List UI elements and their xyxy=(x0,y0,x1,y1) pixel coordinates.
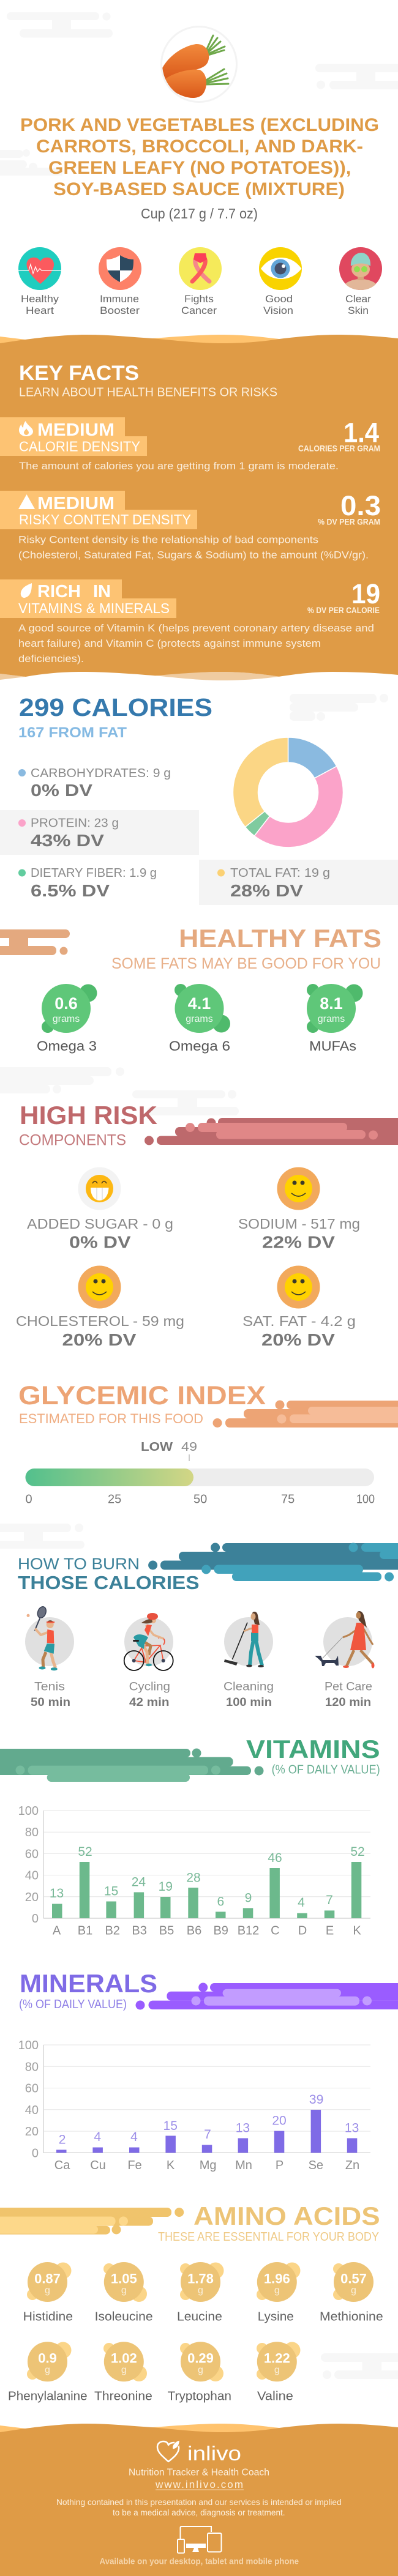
fact: risky content density xyxy=(0,490,381,560)
amino: isoleucine: g xyxy=(121,2285,127,2296)
amino: phenylalanine: 0.9 xyxy=(38,2351,57,2366)
label: tennis: 50 min xyxy=(31,1696,70,1709)
bar chart: vitamins: E xyxy=(326,1924,334,1937)
subheading: glycemic index: ESTIMATED FOR THIS FOOD xyxy=(19,1411,203,1426)
label: immune booster: Immune xyxy=(100,293,139,305)
tagline: Nutrition Tracker & Health Coach xyxy=(129,2467,269,2478)
amino: histidine xyxy=(23,2262,73,2324)
bar chart: vitamins: 46 xyxy=(268,1851,282,1865)
serving size: Cup (217 g / 7.7 oz) xyxy=(141,206,258,221)
fact: rich in vitamins and minerals: VITAMINS & MINERALS xyxy=(18,600,170,616)
background wisp xyxy=(0,1524,84,1549)
amino: lysine: 1.96 xyxy=(264,2271,290,2286)
disclaimer xyxy=(56,2497,342,2517)
macro: dietary fiber: DIETARY FIBER: 1.9 g xyxy=(31,866,157,880)
bar chart: minerals: 80 xyxy=(25,2060,39,2074)
amino: tryptophan: 0.29 xyxy=(187,2351,214,2366)
badge: omega 3: 0.6 xyxy=(54,994,78,1013)
risk: cholesterol xyxy=(16,1265,184,1349)
bar chart: minerals: Cu xyxy=(90,2159,106,2172)
bar chart: vitamins: B5 xyxy=(159,1924,174,1937)
heading: how to burn: HOW TO BURN xyxy=(18,1554,140,1573)
heading: those calories: THOSE CALORIES xyxy=(18,1572,200,1593)
label: cleaning xyxy=(223,1680,274,1709)
logo: inlivo xyxy=(157,2440,241,2465)
carrot bottom xyxy=(164,70,206,98)
badge: mufas xyxy=(307,984,362,1054)
bar chart: vitamins: 4 xyxy=(298,1896,305,1910)
fact: rich in vitamins and minerals: A good source of Vitamin K (helps prevent coronary artery disease and xyxy=(18,622,374,634)
donut chart xyxy=(233,737,343,847)
bar chart: minerals: Se xyxy=(309,2159,323,2172)
panel: high risk components xyxy=(0,1067,398,1349)
bar chart: vitamins: B6 xyxy=(187,1924,201,1937)
bar chart: minerals: Mg xyxy=(200,2159,216,2172)
decorative wisp xyxy=(213,1400,398,1428)
bar chart: minerals: 100 xyxy=(18,2039,39,2052)
fact: risky content density: MEDIUM xyxy=(37,494,115,513)
gauge: glycemic index: 49 xyxy=(181,1440,197,1454)
icon: leaf xyxy=(21,583,32,598)
bar chart: vitamins: 7 xyxy=(326,1893,333,1907)
panel: glycemic index xyxy=(18,1381,398,1506)
bar chart: minerals: Mn xyxy=(235,2159,252,2172)
bar chart: vitamins: C xyxy=(271,1924,280,1937)
panel: vitamins xyxy=(0,1735,380,1937)
bar chart: minerals: 39 xyxy=(309,2093,323,2107)
icon: warning xyxy=(18,494,35,509)
amino: methionine: 0.57 xyxy=(340,2271,367,2286)
badge: omega 6 xyxy=(169,984,230,1054)
activity: tennis xyxy=(25,1606,74,1670)
icon: devices xyxy=(178,2526,222,2553)
heading: key facts: LEARN ABOUT HEALTH BENEFITS OR RISKS xyxy=(19,385,277,399)
bar chart: minerals: 2 xyxy=(59,2133,66,2146)
label: clear skin: Skin xyxy=(348,305,369,316)
amino: phenylalanine: g xyxy=(45,2365,50,2375)
risk: saturated fat xyxy=(242,1265,356,1349)
gauge: glycemic index xyxy=(26,1440,375,1506)
heading: minerals: MINERALS xyxy=(20,1969,157,1998)
bar chart: minerals xyxy=(18,2039,370,2172)
amino: valine: Valine xyxy=(257,2390,293,2403)
badge: mufas: MUFAs xyxy=(309,1038,356,1054)
label: cycling xyxy=(129,1680,170,1709)
bar chart: vitamins: 28 xyxy=(186,1871,201,1885)
logo: inlivo: inlivo xyxy=(187,2442,241,2465)
amino: leucine xyxy=(177,2262,224,2324)
bar chart: minerals: 15 xyxy=(163,2119,178,2133)
decorative wisp xyxy=(0,1749,263,1782)
bar chart: vitamins: 100 xyxy=(18,1804,39,1818)
heading: calories: 299 CALORIES xyxy=(19,693,212,721)
amino: lysine xyxy=(257,2262,300,2324)
amino: phenylalanine xyxy=(8,2342,88,2403)
bar chart: minerals: Fe xyxy=(127,2159,142,2172)
amino: histidine: 0.87 xyxy=(34,2271,61,2286)
fact: rich in vitamins and minerals: deficiencies). xyxy=(18,653,84,664)
bar chart: vitamins: 60 xyxy=(25,1847,39,1861)
risk: cholesterol: CHOLESTEROL - 59 mg xyxy=(16,1313,184,1329)
bar chart: minerals: 4 xyxy=(94,2130,101,2144)
gauge: glycemic index: 0 xyxy=(26,1493,32,1506)
fact: risky content density: % DV PER GRAM xyxy=(318,516,380,526)
orange panel background with waves xyxy=(0,335,398,680)
bar chart: vitamins: 19 xyxy=(159,1880,173,1894)
bar chart: vitamins xyxy=(18,1804,370,1937)
background wisp xyxy=(290,694,388,721)
fact: risky content density: RISKY CONTENT DENSITY xyxy=(19,512,191,527)
heading: vitamins: VITAMINS xyxy=(246,1735,380,1763)
availability note: Available on your desktop, tablet and mobile phone xyxy=(99,2556,299,2566)
bar chart: vitamins: D xyxy=(298,1924,307,1937)
fact: calorie density: The amount of calories you are getting from 1 gram is moderate. xyxy=(19,460,339,472)
carrot leaves xyxy=(205,35,228,84)
label: fights cancer: Fights xyxy=(184,293,214,305)
badge: omega 6: 4.1 xyxy=(188,994,211,1013)
label: good vision xyxy=(263,293,293,316)
bar chart: vitamins: B3 xyxy=(132,1924,147,1937)
heading: high risk: HIGH RISK xyxy=(20,1101,157,1130)
amino: lysine: g xyxy=(274,2285,280,2296)
fact: calorie density: CALORIE DENSITY xyxy=(19,438,140,454)
subheading: amino acids: THESE ARE ESSENTIAL FOR YOUR BODY xyxy=(158,2230,379,2244)
amino: tryptophan: g xyxy=(198,2365,203,2375)
fact: rich in vitamins and minerals: RICH xyxy=(37,582,81,601)
bar chart: minerals: 0 xyxy=(32,2146,39,2160)
bar chart: vitamins: 24 xyxy=(132,1875,146,1889)
fact: rich in vitamins and minerals: heart failure) and Vitamin C (protects against immune system xyxy=(18,638,321,649)
amino: methionine: Methionine xyxy=(320,2310,383,2324)
heading: key facts xyxy=(19,362,277,399)
label: healthy heart: Heart xyxy=(26,305,54,316)
icon: fights cancer xyxy=(179,247,222,290)
subheading: components: COMPONENTS xyxy=(19,1132,126,1149)
icon: good vision xyxy=(259,247,302,290)
fact: rich in vitamins and minerals: 19 xyxy=(351,578,380,609)
label: good vision: Vision xyxy=(263,305,293,316)
subheading: minerals: (% OF DAILY VALUE) xyxy=(19,1998,127,2011)
amino: phenylalanine: Phenylalanine xyxy=(8,2390,88,2403)
icon: healthy heart xyxy=(18,247,61,290)
badge: omega 3: grams xyxy=(53,1014,80,1024)
panel: amino acids xyxy=(0,2202,398,2403)
heading: amino acids: AMINO ACIDS xyxy=(193,2202,380,2230)
label: tennis xyxy=(31,1680,70,1709)
background wisp xyxy=(321,2353,398,2379)
bar chart: vitamins: B9 xyxy=(213,1924,228,1937)
gauge: glycemic index: 75 xyxy=(281,1493,295,1506)
label: good vision: Good xyxy=(265,293,293,305)
risk: sodium: 22% DV xyxy=(262,1233,335,1252)
macro: dietary fiber xyxy=(18,866,157,900)
bar chart: vitamins: B1 xyxy=(78,1924,92,1937)
bar chart: vitamins: B12 xyxy=(238,1924,259,1937)
label: cycling: Cycling xyxy=(129,1680,170,1694)
bar chart: vitamins: A xyxy=(53,1924,61,1937)
label: pet care xyxy=(325,1680,372,1709)
bar chart: minerals: 60 xyxy=(25,2082,39,2096)
label: tennis: Tenis xyxy=(34,1680,65,1694)
risk: saturated fat: SAT. FAT - 4.2 g xyxy=(242,1313,356,1329)
heading: healthy fats: HEALTHY FATS xyxy=(179,924,381,953)
label: immune booster xyxy=(100,293,140,316)
decorative wisp xyxy=(0,929,70,955)
fact: risky content density: 0.3 xyxy=(340,490,381,521)
bar chart: minerals: 13 xyxy=(345,2121,359,2135)
title: CARROTS, BROCCOLI, AND DARK- xyxy=(36,136,363,157)
badge: omega 3: Omega 3 xyxy=(37,1038,97,1054)
disclaimer: to be a medical advice, diagnosis or treatment. xyxy=(113,2507,285,2517)
website link: www.inlivo.com xyxy=(155,2479,243,2490)
amino: lysine: Lysine xyxy=(258,2310,294,2324)
disclaimer: Nothing contained in this presentation and our services is intended or implied xyxy=(56,2497,342,2507)
bar chart: vitamins: 80 xyxy=(25,1826,39,1839)
risk: cholesterol: 20% DV xyxy=(62,1330,137,1349)
bar chart: vitamins: 13 xyxy=(50,1886,64,1900)
bar chart: minerals: P xyxy=(276,2159,283,2172)
label: immune booster: Booster xyxy=(100,305,140,316)
label: pet care: Pet Care xyxy=(325,1680,372,1694)
bar chart: vitamins: K xyxy=(353,1924,361,1937)
amino: leucine: 1.78 xyxy=(187,2271,214,2286)
fact: calorie density: CALORIES PER GRAM xyxy=(298,443,380,453)
amino: methionine xyxy=(320,2262,383,2324)
label: cleaning: 100 min xyxy=(226,1696,272,1709)
icon: immune booster xyxy=(99,247,141,290)
amino: isoleucine: Isoleucine xyxy=(95,2310,153,2324)
activity: cleaning xyxy=(224,1612,273,1667)
fact: risky content density: (Cholesterol, Saturated Fat, Sugars & Sodium) to the amount (%DV/gr). xyxy=(18,549,369,560)
amino: threonine: 1.02 xyxy=(111,2351,137,2366)
fact: rich in vitamins and minerals xyxy=(0,578,380,664)
risk: added sugar: 0% DV xyxy=(69,1233,131,1252)
panel: key facts xyxy=(0,335,398,680)
heading: glycemic index: GLYCEMIC INDEX xyxy=(18,1381,266,1410)
macro: total fat: TOTAL FAT: 19 g xyxy=(230,866,330,880)
panel: minerals xyxy=(18,1969,398,2172)
panel: footer xyxy=(0,2424,398,2576)
title: PORK AND VEGETABLES (EXCLUDING xyxy=(20,115,379,135)
bar chart: vitamins: B2 xyxy=(105,1924,120,1937)
label: cycling: 42 min xyxy=(129,1696,169,1709)
macro: protein xyxy=(0,810,199,855)
bar chart: vitamins: 0 xyxy=(32,1912,39,1926)
amino: isoleucine xyxy=(95,2262,153,2324)
gauge: glycemic index: 25 xyxy=(108,1493,121,1506)
fact: calorie density: 1.4 xyxy=(344,417,379,448)
fact: risky content density: Risky Content density is the relationship of bad components xyxy=(18,534,318,546)
bar chart: minerals: Ca xyxy=(54,2159,70,2172)
label: fights cancer xyxy=(181,293,217,316)
bar chart: minerals: 13 xyxy=(236,2121,250,2135)
label: healthy heart xyxy=(21,293,59,316)
subheading: vitamins: (% OF DAILY VALUE) xyxy=(272,1763,380,1777)
panel: how to burn calories xyxy=(0,1524,398,1709)
amino: threonine: Threonine xyxy=(94,2390,152,2403)
fact: rich in vitamins and minerals: IN xyxy=(93,582,111,601)
badge: mufas: 8.1 xyxy=(320,994,343,1013)
title: SOY-BASED SAUCE (MIXTURE) xyxy=(53,179,345,199)
decorative wisp xyxy=(0,2208,184,2235)
amino: threonine: g xyxy=(121,2365,127,2375)
bar chart: vitamins: 9 xyxy=(245,1891,252,1905)
background wisps xyxy=(0,1067,239,1115)
badge: mufas: grams xyxy=(318,1014,345,1024)
risk: saturated fat: 20% DV xyxy=(261,1330,335,1349)
amino: isoleucine: 1.05 xyxy=(111,2271,137,2286)
bar chart: minerals: 7 xyxy=(204,2127,211,2142)
subheading: from fat: 167 FROM FAT xyxy=(18,724,127,741)
badge: omega 6: grams xyxy=(186,1014,213,1024)
title xyxy=(20,115,379,199)
bar chart: vitamins: 52 xyxy=(350,1845,365,1859)
amino: leucine: g xyxy=(198,2285,203,2296)
health benefits row xyxy=(18,247,382,316)
fact: rich in vitamins and minerals: % DV PER CALORIE xyxy=(307,605,380,615)
bar chart: minerals: 4 xyxy=(130,2130,138,2144)
macro: total fat xyxy=(199,860,398,905)
risk: added sugar xyxy=(27,1167,173,1252)
bar chart: vitamins: 6 xyxy=(217,1894,224,1908)
panel: calories xyxy=(0,693,398,905)
panel: healthy fats xyxy=(0,924,381,1054)
activity: pet care xyxy=(315,1611,375,1668)
label: fights cancer: Cancer xyxy=(181,305,217,316)
amino: valine: g xyxy=(274,2365,280,2375)
subheading: healthy fats: SOME FATS MAY BE GOOD FOR YOU xyxy=(111,955,381,972)
macro: protein: PROTEIN: 23 g xyxy=(31,816,119,830)
bar chart: vitamins: 15 xyxy=(104,1885,118,1898)
amino: leucine: Leucine xyxy=(177,2310,222,2324)
fact: calorie density xyxy=(0,417,380,472)
footer background with waves xyxy=(0,2424,398,2576)
icon: clear skin xyxy=(339,247,382,290)
macro: dietary fiber: 6.5% DV xyxy=(31,881,110,900)
bar chart: minerals: 20 xyxy=(272,2114,287,2128)
risk: sodium: SODIUM - 517 mg xyxy=(238,1216,360,1232)
hero image: carrots xyxy=(160,27,236,102)
label: pet care: 120 min xyxy=(325,1696,371,1709)
decorative wisp xyxy=(136,1982,398,2009)
amino: tryptophan: Tryptophan xyxy=(168,2390,231,2403)
macro: carbohydrates xyxy=(18,767,171,800)
background wisps: header xyxy=(0,12,398,176)
bar chart: vitamins: 40 xyxy=(25,1869,39,1883)
gauge: glycemic index: 50 xyxy=(193,1493,207,1506)
title: GREEN LEAFY (NO POTATOES)), xyxy=(48,158,351,178)
carrot top xyxy=(160,44,209,80)
amino: valine xyxy=(257,2342,300,2403)
decorative wisp xyxy=(145,1118,398,1145)
badge: omega 3 xyxy=(37,984,97,1054)
label: healthy heart: Healthy xyxy=(21,293,59,305)
fact: calorie density: MEDIUM xyxy=(37,420,115,440)
amino: threonine xyxy=(94,2342,152,2403)
label: cleaning: Cleaning xyxy=(223,1680,274,1694)
label: clear skin xyxy=(345,293,371,316)
risk: added sugar: ADDED SUGAR - 0 g xyxy=(27,1216,173,1232)
bar chart: minerals: Zn xyxy=(345,2159,359,2172)
macro: protein: 43% DV xyxy=(31,831,104,850)
decorative wisp xyxy=(148,1543,398,1581)
macro: carbohydrates: CARBOHYDRATES: 9 g xyxy=(31,767,171,780)
amino: valine: 1.22 xyxy=(264,2351,290,2366)
gauge: glycemic index: LOW xyxy=(141,1440,173,1454)
badge: omega 6: Omega 6 xyxy=(169,1038,230,1054)
amino: tryptophan xyxy=(168,2342,231,2403)
bar chart: vitamins: 52 xyxy=(78,1845,92,1859)
macro: total fat: 28% DV xyxy=(230,881,303,900)
label: clear skin: Clear xyxy=(345,293,371,305)
icon: flame xyxy=(19,421,33,436)
risk: sodium xyxy=(238,1167,360,1252)
macro: carbohydrates: 0% DV xyxy=(31,781,92,800)
bar chart: minerals: K xyxy=(167,2159,175,2172)
amino: histidine: g xyxy=(45,2285,50,2296)
bar chart: vitamins: 20 xyxy=(25,1891,39,1904)
bar chart: minerals: 20 xyxy=(25,2125,39,2139)
amino: methionine: g xyxy=(351,2285,356,2296)
bar chart: minerals: 40 xyxy=(25,2104,39,2117)
activity: cycling xyxy=(124,1613,173,1670)
amino: histidine: Histidine xyxy=(23,2310,73,2324)
heading: key facts: KEY FACTS xyxy=(19,362,139,385)
gauge: glycemic index: 100 xyxy=(356,1493,375,1506)
